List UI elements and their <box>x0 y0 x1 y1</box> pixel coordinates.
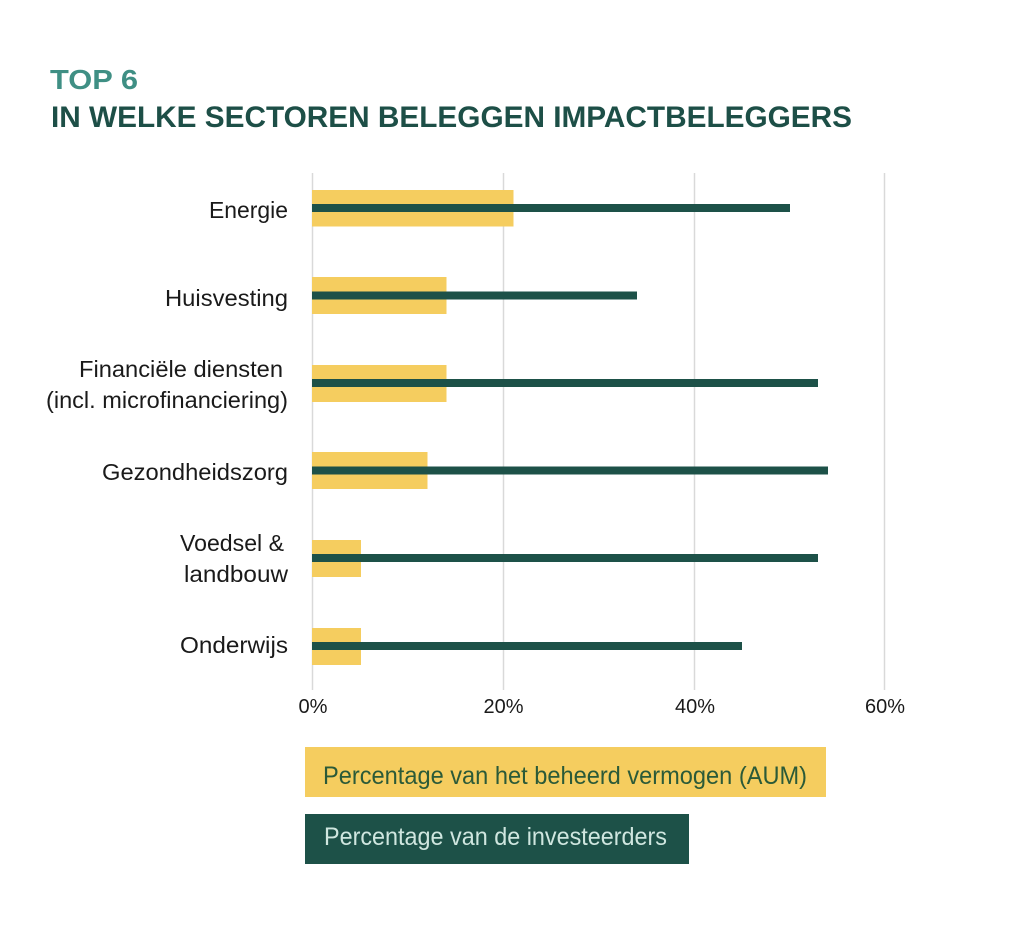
row: Huisvesting <box>165 277 637 314</box>
title line: top 6: TOP 6 <box>50 64 138 95</box>
legend: investors: Percentage van de investeerders <box>324 823 667 851</box>
row: Onderwijs <box>180 628 742 665</box>
x axis labels <box>298 696 905 718</box>
row: Gezondheidszorg <box>102 452 828 489</box>
row: Huisvesting: Huisvesting <box>165 285 288 311</box>
row: Gezondheidszorg: Gezondheidszorg <box>102 459 288 485</box>
x axis labels: 20% <box>484 696 524 718</box>
row: Financiële diensten <box>46 356 818 413</box>
row: Voedsel & landbouw: Voedsel & <box>180 530 284 556</box>
bar chart <box>46 173 905 718</box>
title <box>50 64 852 134</box>
x axis labels: 60% <box>865 696 905 718</box>
row: Financiële diensten: Financiële diensten <box>79 356 283 382</box>
x axis labels: 40% <box>675 696 715 718</box>
row: Voedsel & landbouw: landbouw <box>184 561 288 587</box>
legend: investors <box>305 814 689 864</box>
row: Energie: Energie <box>209 197 288 223</box>
x axis labels: 0% <box>298 696 328 718</box>
row: Voedsel & landbouw <box>180 530 818 587</box>
legend: AUM <box>305 747 826 797</box>
title line: main heading: IN WELKE SECTOREN BELEGGEN IMPACTBELEGGERS <box>51 101 852 134</box>
row: Energie <box>209 190 790 226</box>
row: Onderwijs: Onderwijs <box>180 632 288 658</box>
legend: AUM: Percentage van het beheerd vermogen (AUM) <box>323 762 807 790</box>
row: Financiële diensten: (incl. microfinanciering) <box>46 387 288 413</box>
